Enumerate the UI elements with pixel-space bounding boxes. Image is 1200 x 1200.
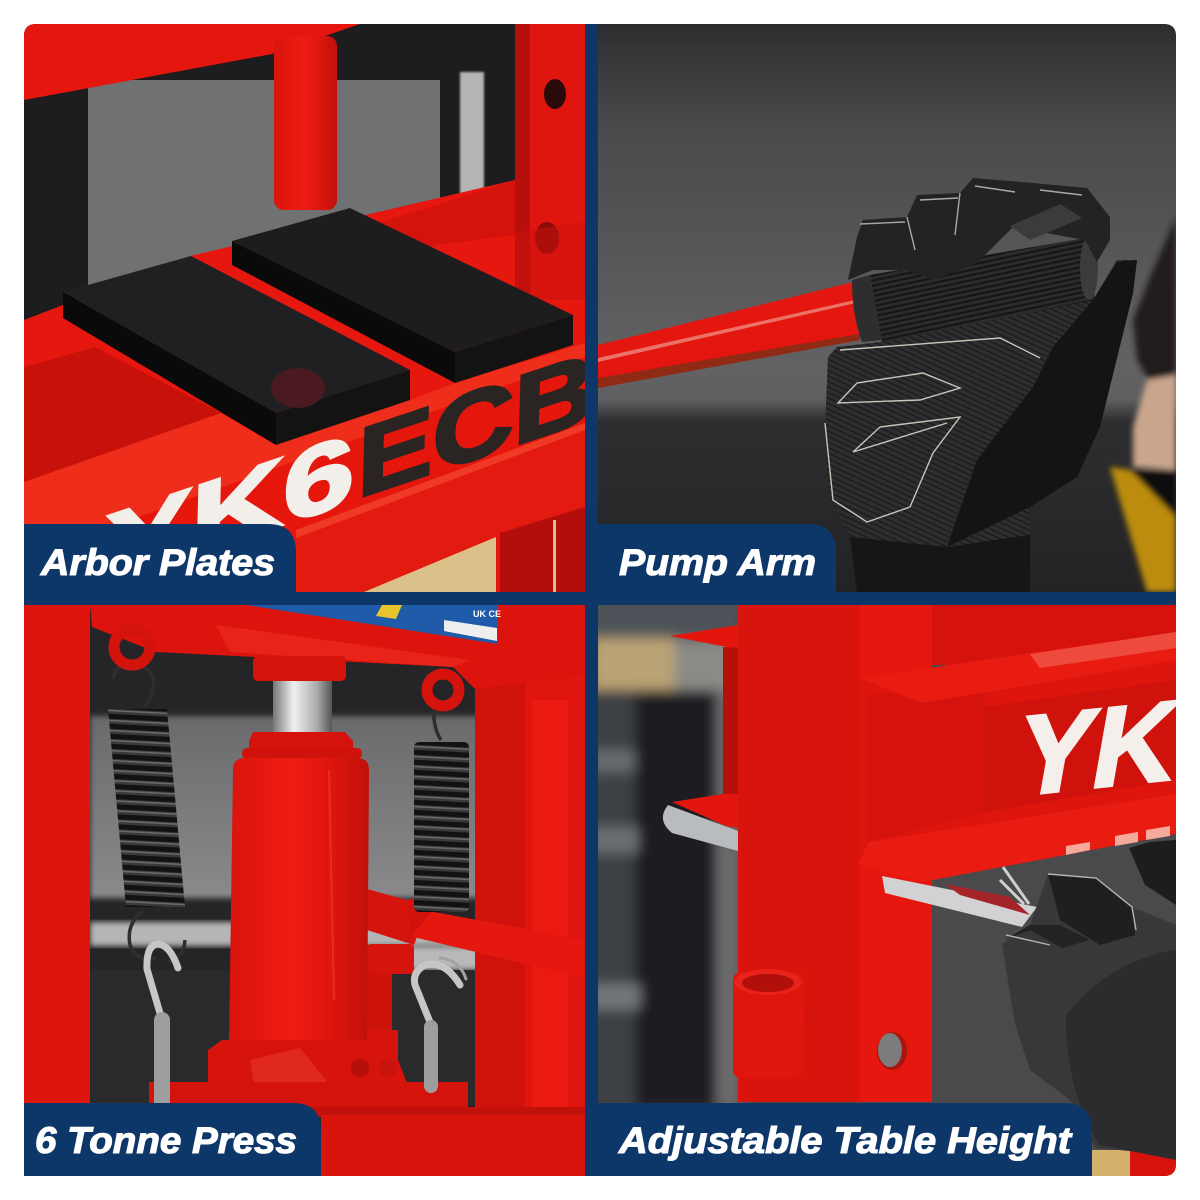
handle socket [367,889,417,1030]
tan background [1085,1150,1176,1176]
plate left [63,256,410,445]
plate right [232,208,573,383]
glove upper [1129,840,1176,905]
frame lettering: YK6 [104,413,356,606]
grip [852,236,1098,342]
label: 6 tonne press [24,1103,321,1176]
label: pump arm: Pump Arm [619,542,816,583]
panel: 6 tonne press [24,605,585,1176]
label: adjustable table height: Adjustable Table Height [618,1120,1073,1161]
top beam [24,24,360,100]
chrome pin rear [663,805,738,851]
left spring [108,709,185,907]
label: adjustable table height [598,1103,1092,1176]
upright [738,605,932,1102]
spring hooks [113,663,441,962]
handle [408,912,525,964]
fingers [848,178,1110,280]
wood behind [364,537,496,592]
right spring [414,742,469,912]
base table [321,1115,585,1176]
frame uprights [24,605,90,1105]
rating plate [246,605,501,644]
tray [24,347,221,482]
lower lip [296,430,585,540]
front ledge [24,343,585,524]
hole [877,1032,907,1070]
table surface [24,180,585,592]
upper beam [932,605,1176,665]
piston [253,656,346,733]
mounting rings [114,629,459,706]
rating plate: UK CE [473,609,501,619]
eye bolts [147,944,466,1102]
glove thumb [947,260,1137,547]
frame lettering [105,359,585,526]
face with logo [139,436,364,517]
panel: arbor plates [24,24,596,606]
frame lettering: ECB [356,331,596,520]
table channel [858,632,1200,882]
top beam [90,605,585,689]
label: arbor plates: Arbor Plates [40,542,275,583]
bottle jack [130,732,585,1117]
person's face [1110,217,1176,592]
label: arbor plates [24,524,296,592]
chrome pin front [882,867,1037,927]
right upright [530,24,585,300]
panel: pump arm [598,24,1176,592]
rear channel [670,625,738,828]
glove palm [826,260,1137,547]
holder [733,969,815,1078]
glove [1002,874,1176,1160]
ram [274,36,337,210]
rear post [500,507,585,592]
blurred workshop background [590,600,741,1110]
label: pump arm [598,524,836,592]
panel: adjustable table height [590,600,1200,1176]
arm tube [598,282,860,388]
stitching [825,338,1040,522]
label: 6 tonne press: 6 Tonne Press [35,1120,297,1161]
